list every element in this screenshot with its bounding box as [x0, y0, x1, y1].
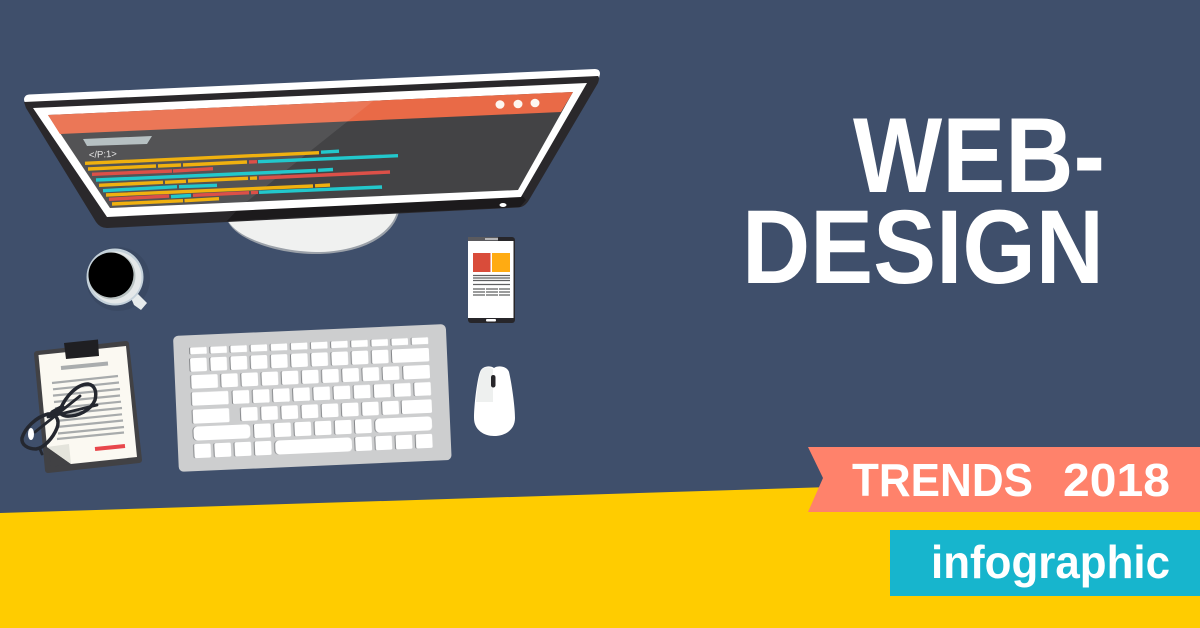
paper fold	[47, 444, 71, 464]
red image tile	[473, 253, 490, 272]
clip	[64, 340, 99, 359]
coffee	[88, 252, 136, 300]
phone top left shade	[468, 237, 498, 241]
screen	[48, 92, 573, 208]
phone speaker	[485, 238, 498, 240]
monitor stand	[228, 212, 399, 254]
title: WEB-	[853, 95, 1105, 215]
ribbon: trends 2018: 2018	[1063, 454, 1170, 506]
grey heading bar	[83, 136, 152, 146]
coffee cup	[86, 247, 150, 311]
clipboard board	[37, 344, 139, 470]
dark reflection on lower bezel	[227, 193, 526, 221]
cup handle	[131, 294, 147, 310]
yellow slanted band	[0, 487, 1200, 628]
scroll wheel	[491, 375, 496, 388]
title	[742, 95, 1105, 306]
monitor	[24, 69, 600, 228]
document heading line	[61, 364, 108, 368]
phone home button	[486, 319, 496, 322]
browser title bar	[48, 92, 573, 134]
document text lines	[52, 376, 124, 439]
white screen bezel	[33, 83, 587, 217]
clipboard with glasses	[22, 340, 139, 470]
mouse body	[474, 366, 515, 436]
ribbon: trends 2018	[808, 447, 1200, 512]
lens glint	[28, 428, 34, 440]
label: infographic	[890, 530, 1200, 596]
smartphone	[468, 237, 515, 323]
keys	[190, 337, 434, 458]
phone text lines	[473, 276, 510, 295]
keyboard	[173, 324, 452, 472]
mouse left button shade	[476, 367, 493, 402]
code lines	[85, 151, 398, 204]
monitor top white edge	[24, 69, 600, 103]
mouse	[474, 366, 515, 436]
phone screen	[468, 241, 514, 318]
label: infographic: infographic	[931, 536, 1170, 588]
keyboard body	[173, 324, 452, 472]
power button	[500, 203, 506, 207]
code tag: </P:1>	[89, 149, 118, 161]
window dots	[496, 99, 540, 109]
phone body	[468, 237, 515, 323]
cup shadow	[86, 247, 150, 311]
cup rim	[86, 248, 144, 306]
glasses	[22, 384, 97, 454]
ribbon: trends 2018: TRENDS	[852, 454, 1033, 506]
red signature line	[95, 446, 125, 449]
monitor body	[24, 76, 599, 228]
screen glare	[48, 101, 373, 208]
title: DESIGN	[742, 189, 1104, 306]
orange image tile	[492, 253, 510, 272]
paper	[38, 346, 137, 464]
